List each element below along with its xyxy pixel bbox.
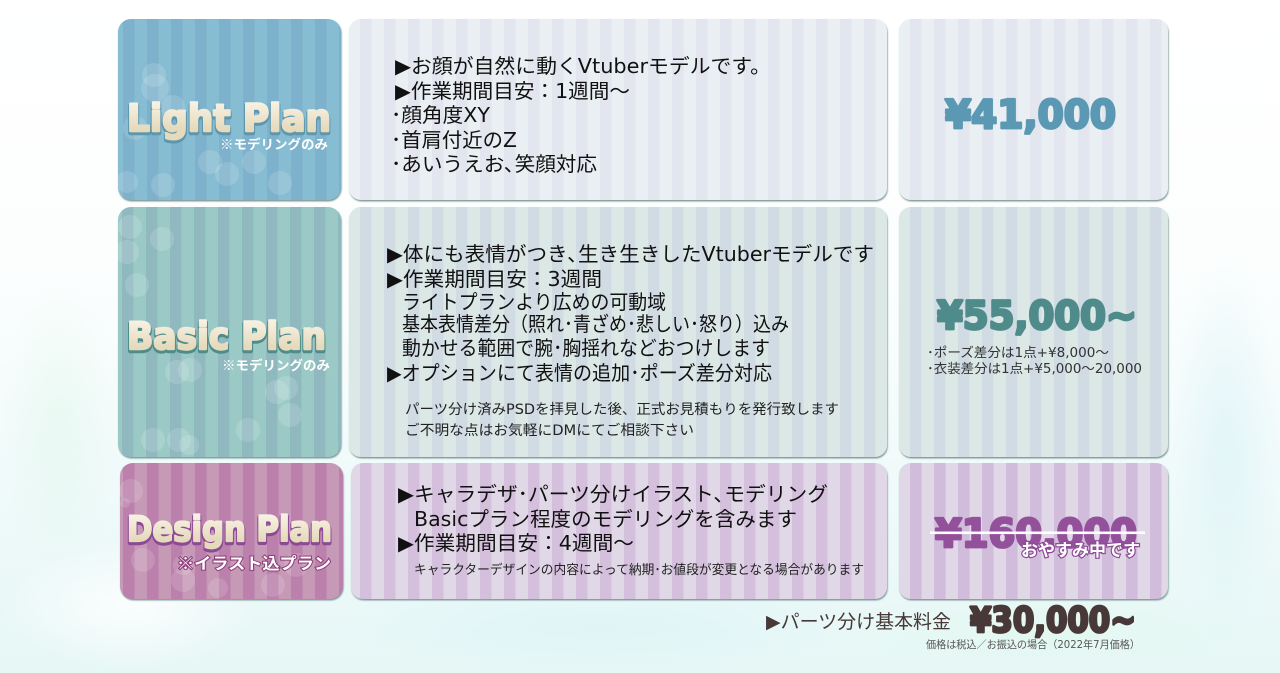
text: option prices: ･ポーズ差分は1点+¥8,000～ [927,345,1109,361]
text: Basic Plan features: ▶体にも表情がつき､生き生きしたVtuberモデルです [387,242,874,266]
text: Light Plan features: ･顔角度XY [391,103,491,127]
text: Design Plan features: Basicプラン程度のモデリングを含みます [414,507,797,531]
text: Basic Plan features: 基本表情差分（照れ･青ざめ･悲しい･怒り）込み [402,312,789,336]
panel: Light Plan price [899,19,1168,200]
text: Light Plan features: ･首肩付近のZ [391,128,517,152]
heading: Light Plan: Light Plan [127,97,331,140]
label: on hiatus: おやすみ中です [1021,536,1140,561]
heading: Design Plan: Design Plan [127,510,332,550]
base parts-separation fee [766,601,1140,651]
text: option prices: ･衣装差分は1点+¥5,000～20,000 [927,362,1142,377]
text: Basic Plan features: ライトプランより広めの可動域 [402,290,666,314]
panel: Basic Plan price [899,207,1168,457]
note: illustration included: ※イラスト込プラン [177,550,331,574]
text: Basic Plan notes: ご不明な点はお気軽にDMにてご相談下さい [405,423,694,439]
label: parts fee: ▶パーツ分け基本料金 [766,611,951,633]
text: Light Plan features [391,54,771,176]
heading: Design Plan: Design Plan [127,512,332,552]
panel: Design Plan price [899,463,1168,599]
text: Design Plan features [398,482,828,555]
text: Basic Plan features: 動かせる範囲で腕･胸揺れなどおつけします [402,336,770,360]
note: tax and date: 価格は税込／お振込の場合（2022年7月価格） [926,638,1140,651]
text: option prices [927,345,1142,377]
heading: Basic Plan: Basic Plan [127,315,326,358]
heading: Basic Plan: Basic Plan [127,317,326,360]
price: 41,000 yen: ¥41,000 [945,93,1116,138]
panel: Basic Plan description [349,207,887,457]
text: Basic Plan features: ▶オプションにて表情の追加･ポーズ差分対応 [387,361,772,385]
text: Basic Plan notes: パーツ分け済みPSDを拝見した後、正式お見積もりを発行致します [405,402,839,418]
price: 30,000 yen and up: ¥30,000~ [970,601,1136,641]
note: modeling only: ※モデリングのみ [222,355,330,374]
text: Light Plan features: ･あいうえお､笑顔対応 [391,152,597,176]
text: Basic Plan notes [405,402,839,439]
panel: Design Plan description [351,463,887,599]
heading: Light Plan: Light Plan [127,99,331,142]
panel: Design Plan title [119,463,343,599]
text: Design Plan features: ▶作業期間目安：4週間～ [398,531,634,555]
strikethrough line [930,532,1145,534]
text: Light Plan features: ▶お顔が自然に動くVtuberモデルです。 [395,54,771,78]
note: modeling only: ※モデリングのみ [220,134,328,153]
price: 55,000 yen and up: ¥55,000~ [937,294,1137,339]
text: Light Plan features: ▶作業期間目安：1週間～ [395,79,630,103]
price: 160,000 yen struck through: ¥160,000 [935,512,1137,557]
panel: Basic Plan title [115,207,341,457]
text: Basic Plan features: ▶作業期間目安：3週間 [387,267,602,291]
text: Basic Plan features [387,242,874,385]
panel: Light Plan description [349,19,887,200]
text: Design Plan features: ▶キャラデザ･パーツ分けイラスト､モデリング [398,482,828,506]
panel: Light Plan title [116,19,341,200]
text: Design Plan note: キャラクターデザインの内容によって納期･お値段が変更となる場合があります [414,562,864,578]
